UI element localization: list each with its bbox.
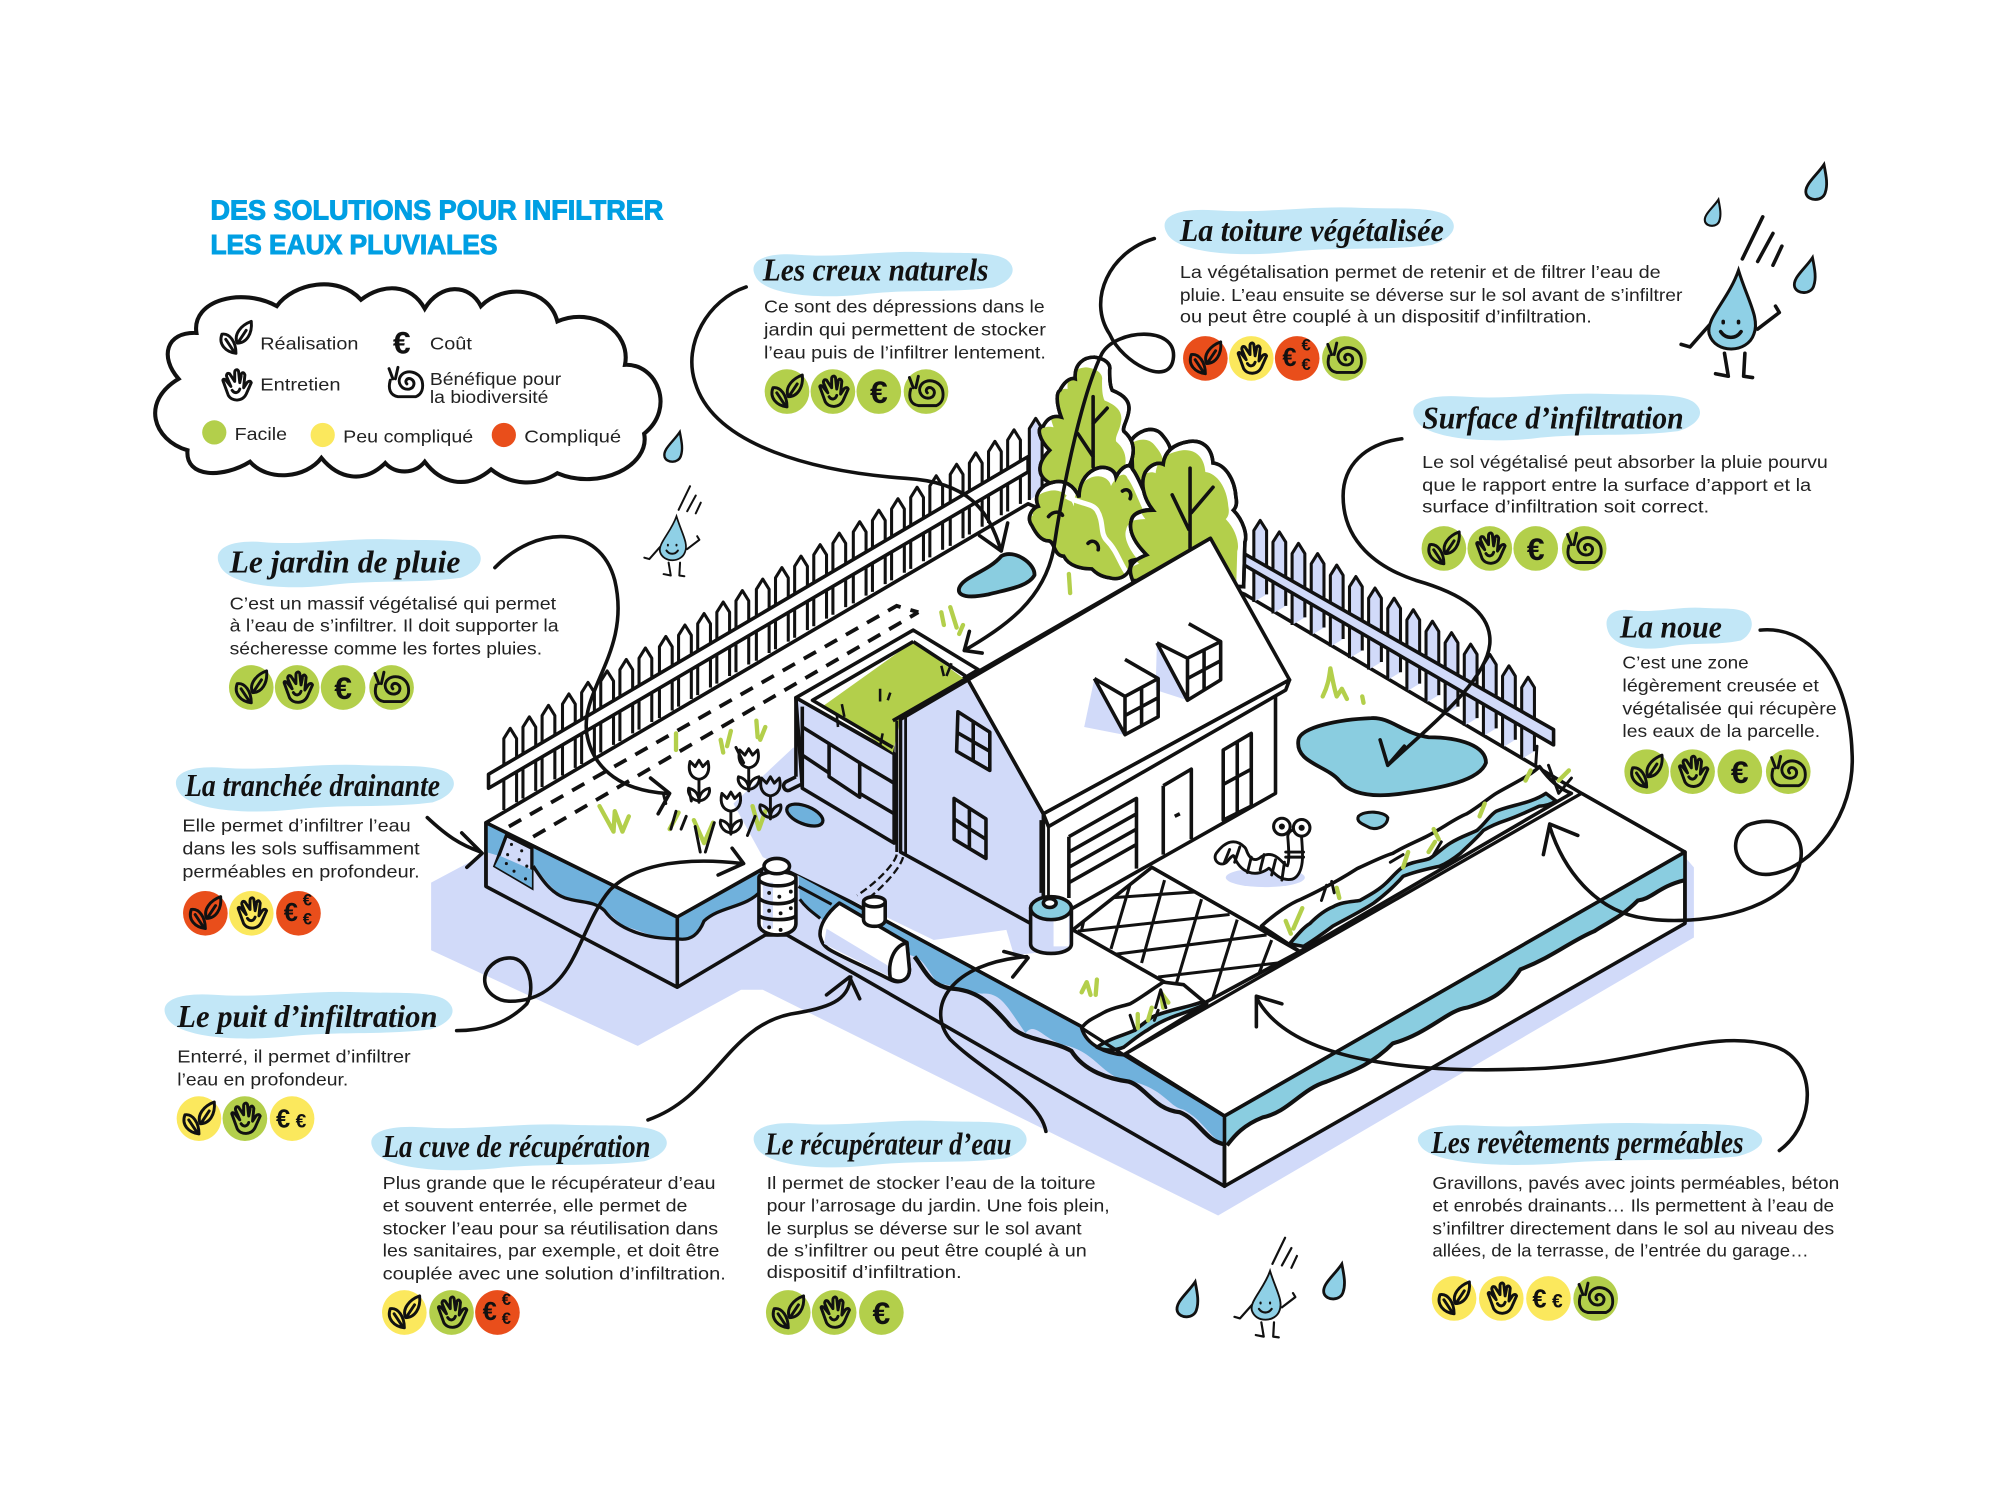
arrow: la noue xyxy=(1543,630,1852,921)
text block: de s’infiltrer ou peut être couplé à un xyxy=(767,1240,1087,1260)
panel: la toiture végétalisée xyxy=(1165,207,1682,381)
arrow: creux naturels xyxy=(692,287,1008,551)
text block xyxy=(177,1046,411,1089)
trees xyxy=(1024,357,1246,596)
rating icons: € xyxy=(502,1290,511,1309)
water bands xyxy=(486,823,1685,1186)
character: bottom xyxy=(1234,1238,1297,1337)
text block: perméables en profondeur. xyxy=(182,862,420,882)
rating icons: € xyxy=(334,670,352,706)
rating icons xyxy=(1183,336,1367,381)
text block: que le rapport entre la surface d’apport et la xyxy=(1422,475,1811,495)
text block: dispositif d’infiltration. xyxy=(767,1262,962,1282)
rating icons: € xyxy=(303,891,312,910)
text block xyxy=(182,816,420,882)
heading xyxy=(218,539,481,587)
panel: le puit d'infiltration xyxy=(165,992,453,1141)
legend: labels xyxy=(235,333,621,447)
panel: le récupérateur d'eau xyxy=(754,1121,1110,1335)
arrow: toiture végétalisée xyxy=(964,239,1174,653)
rating icons xyxy=(177,1096,314,1141)
shadow under block xyxy=(431,853,1694,1216)
gable windows xyxy=(954,712,990,858)
legend: labels: Bénéfique pour xyxy=(430,369,561,389)
rating icons xyxy=(765,369,948,414)
rating icons: € xyxy=(483,1298,497,1326)
arrows xyxy=(427,239,1852,1151)
heading: Le puit d’infiltration xyxy=(176,999,438,1034)
heading: Les revêtements perméables xyxy=(1430,1125,1744,1160)
legend: labels: Facile xyxy=(235,424,287,444)
legend cloud xyxy=(155,284,661,482)
text block: C’est un massif végétalisé qui permet xyxy=(230,594,556,614)
arrow: cuve de récupération xyxy=(648,977,860,1120)
rating icons: € xyxy=(873,1295,891,1331)
text block xyxy=(1422,452,1828,517)
arrow: revêtements perméables xyxy=(1256,996,1807,1151)
panel: la noue xyxy=(1607,608,1837,794)
character: top right xyxy=(1681,217,1782,378)
heading: La noue xyxy=(1619,610,1722,645)
heading: Les creux naturels xyxy=(762,253,989,288)
drainage trench section xyxy=(495,835,532,888)
text block: Plus grande que le récupérateur d’eau xyxy=(383,1173,716,1193)
house shadow on ground xyxy=(733,747,1059,955)
rating icons: € xyxy=(296,1112,307,1133)
heading xyxy=(1165,207,1454,254)
garage door, door and window xyxy=(1069,733,1251,898)
legend: labels: la biodiversité xyxy=(430,387,549,407)
panel: les revêtements perméables xyxy=(1418,1123,1839,1321)
legend: pictograms xyxy=(221,321,423,400)
rain characters and drops xyxy=(644,165,1827,1337)
rating icons: € xyxy=(502,1309,511,1328)
rating icons: € xyxy=(1552,1291,1563,1312)
legend: difficulty dots xyxy=(202,420,516,447)
buried pipe xyxy=(857,855,903,899)
dashed trench lines xyxy=(509,606,918,837)
grass tufts xyxy=(599,574,1569,1028)
arrow: tranchée drainante xyxy=(427,818,482,867)
rating icons: € xyxy=(870,374,888,410)
gable wall xyxy=(901,680,1043,923)
rating icons xyxy=(382,1290,520,1335)
legend: pictograms: € xyxy=(393,324,411,360)
drops: bottom xyxy=(1177,1264,1345,1317)
rating icons xyxy=(229,665,414,710)
front wall xyxy=(1043,693,1276,916)
text block xyxy=(767,1173,1110,1282)
text block: et enrobés drainants… Ils permettent à l’eau de xyxy=(1432,1196,1834,1216)
text block: les sanitaires, par exemple, et doit être xyxy=(383,1240,719,1260)
legend: labels: Entretien xyxy=(260,374,341,394)
rating icons: € xyxy=(1532,1285,1547,1313)
text block: légèrement creusée et xyxy=(1622,675,1819,695)
heading: Le jardin de pluie xyxy=(229,545,460,580)
title: LES EAUX PLUVIALES xyxy=(210,229,497,260)
text block: stocker l’eau pour sa réutilisation dans xyxy=(383,1219,718,1239)
dormers xyxy=(1084,624,1221,735)
text block: ou peut être couplé à un dispositif d’infiltration. xyxy=(1180,307,1592,327)
text block: allées, de la terrasse, de l’entrée du garage… xyxy=(1432,1240,1809,1260)
heading: La cuve de récupération xyxy=(382,1129,651,1164)
character: left xyxy=(644,486,701,576)
illustration: garden block xyxy=(431,357,1694,1216)
text block: pour l’arrosage du jardin. Une fois plein, xyxy=(767,1196,1110,1216)
heading xyxy=(176,765,454,812)
downpipes xyxy=(897,716,1048,895)
text block xyxy=(1622,652,1837,741)
rain barrel xyxy=(1031,897,1071,953)
text block: surface d’infiltration soit correct. xyxy=(1422,497,1709,517)
title xyxy=(210,194,663,260)
heading xyxy=(1607,608,1752,649)
text block: couplée avec une solution d’infiltration. xyxy=(383,1263,726,1283)
text block xyxy=(383,1173,726,1283)
rating icons: € xyxy=(1527,531,1545,567)
green roof extension xyxy=(784,630,978,843)
text block: La végétalisation permet de retenir et de filtrer l’eau de xyxy=(1180,262,1661,282)
legend: labels: Compliqué xyxy=(524,427,621,447)
text block: C’est une zone xyxy=(1622,652,1749,672)
arrow: jardin de pluie xyxy=(495,537,670,814)
heading: Le récupérateur d’eau xyxy=(764,1126,1011,1161)
legend: labels: Peu compliqué xyxy=(343,427,473,447)
text block: et souvent enterrée, elle permet de xyxy=(383,1196,688,1216)
rating icons xyxy=(766,1290,904,1335)
rating icons xyxy=(1422,526,1607,571)
panel: la cuve de récupération xyxy=(371,1124,726,1335)
paved driveway xyxy=(1073,867,1300,1004)
text block: Enterré, il permet d’infiltrer xyxy=(177,1046,411,1066)
left fence xyxy=(489,418,1042,810)
text block: végétalisée qui récupère xyxy=(1622,698,1837,718)
text block: l’eau en profondeur. xyxy=(177,1069,348,1089)
legend: labels: Coût xyxy=(430,333,472,353)
text block: Il permet de stocker l’eau de la toiture xyxy=(767,1173,1096,1193)
tulip flowers xyxy=(663,746,1571,1031)
buried tank xyxy=(820,897,909,982)
text block: à l’eau de s’infiltrer. Il doit supporter la xyxy=(230,615,559,635)
rating icons xyxy=(1432,1276,1618,1321)
heading xyxy=(371,1124,667,1170)
rating icons xyxy=(183,891,321,936)
heading: Surface d’infiltration xyxy=(1422,401,1684,436)
title: DES SOLUTIONS POUR INFILTRER xyxy=(210,194,663,225)
heading xyxy=(754,1121,1027,1167)
text block: s’infiltrer directement dans le sol au niveau des xyxy=(1432,1219,1834,1239)
arrow: récupérateur d'eau xyxy=(941,952,1046,1131)
drop: near legend xyxy=(664,432,682,462)
panel: surface d'infiltration xyxy=(1413,394,1828,571)
ponds xyxy=(784,554,1486,830)
rating icons: € xyxy=(1302,355,1311,374)
heading: La tranchée drainante xyxy=(184,768,440,803)
panel: les creux naturels xyxy=(753,252,1046,414)
text block: pluie. L’eau ensuite se déverse sur le sol avant de s’infiltrer xyxy=(1180,285,1682,305)
text block: Ce sont des dépressions dans le xyxy=(764,296,1045,316)
panel: la tranchée drainante xyxy=(176,765,454,936)
text block xyxy=(1180,262,1682,327)
text block: l’eau puis de l’infiltrer lentement. xyxy=(764,342,1046,362)
text block: Le sol végétalisé peut absorber la pluie pourvu xyxy=(1422,452,1828,472)
infiltration well xyxy=(759,858,796,935)
text block: sécheresse comme les fortes pluies. xyxy=(230,638,542,658)
arrow: puit d'infiltration xyxy=(457,848,744,1031)
drops: top right xyxy=(1705,165,1827,293)
house xyxy=(893,538,1290,923)
rating icons: € xyxy=(303,910,312,929)
rating icons xyxy=(1624,749,1811,794)
rating icons: € xyxy=(1282,344,1297,372)
text block: dans les sols suffisamment xyxy=(182,839,420,859)
heading: La toiture végétalisée xyxy=(1179,213,1444,248)
block faces xyxy=(486,504,1685,1186)
text block xyxy=(1432,1173,1839,1260)
worm xyxy=(1222,818,1310,887)
swale xyxy=(1082,767,1685,1116)
rating icons: € xyxy=(276,1106,290,1134)
rating icons: € xyxy=(1731,754,1749,790)
text block: Gravillons, pavés avec joints perméables, béton xyxy=(1432,1173,1839,1193)
legend: labels: Réalisation xyxy=(260,333,358,353)
text block xyxy=(230,594,559,658)
text block xyxy=(763,296,1046,362)
rating icons: € xyxy=(284,899,298,927)
text block: le surplus se déverse sur le sol avant xyxy=(767,1219,1082,1239)
right fence xyxy=(1237,520,1554,759)
arrow: surface d'infiltration xyxy=(1343,439,1490,765)
text block: Elle permet d’infiltrer l’eau xyxy=(182,816,411,836)
panel: le jardin de pluie xyxy=(218,539,559,710)
text block: jardin qui permettent de stocker xyxy=(763,319,1046,339)
roof xyxy=(968,538,1290,814)
text block: les eaux de la parcelle. xyxy=(1622,721,1820,741)
rating icons: € xyxy=(1302,336,1311,355)
